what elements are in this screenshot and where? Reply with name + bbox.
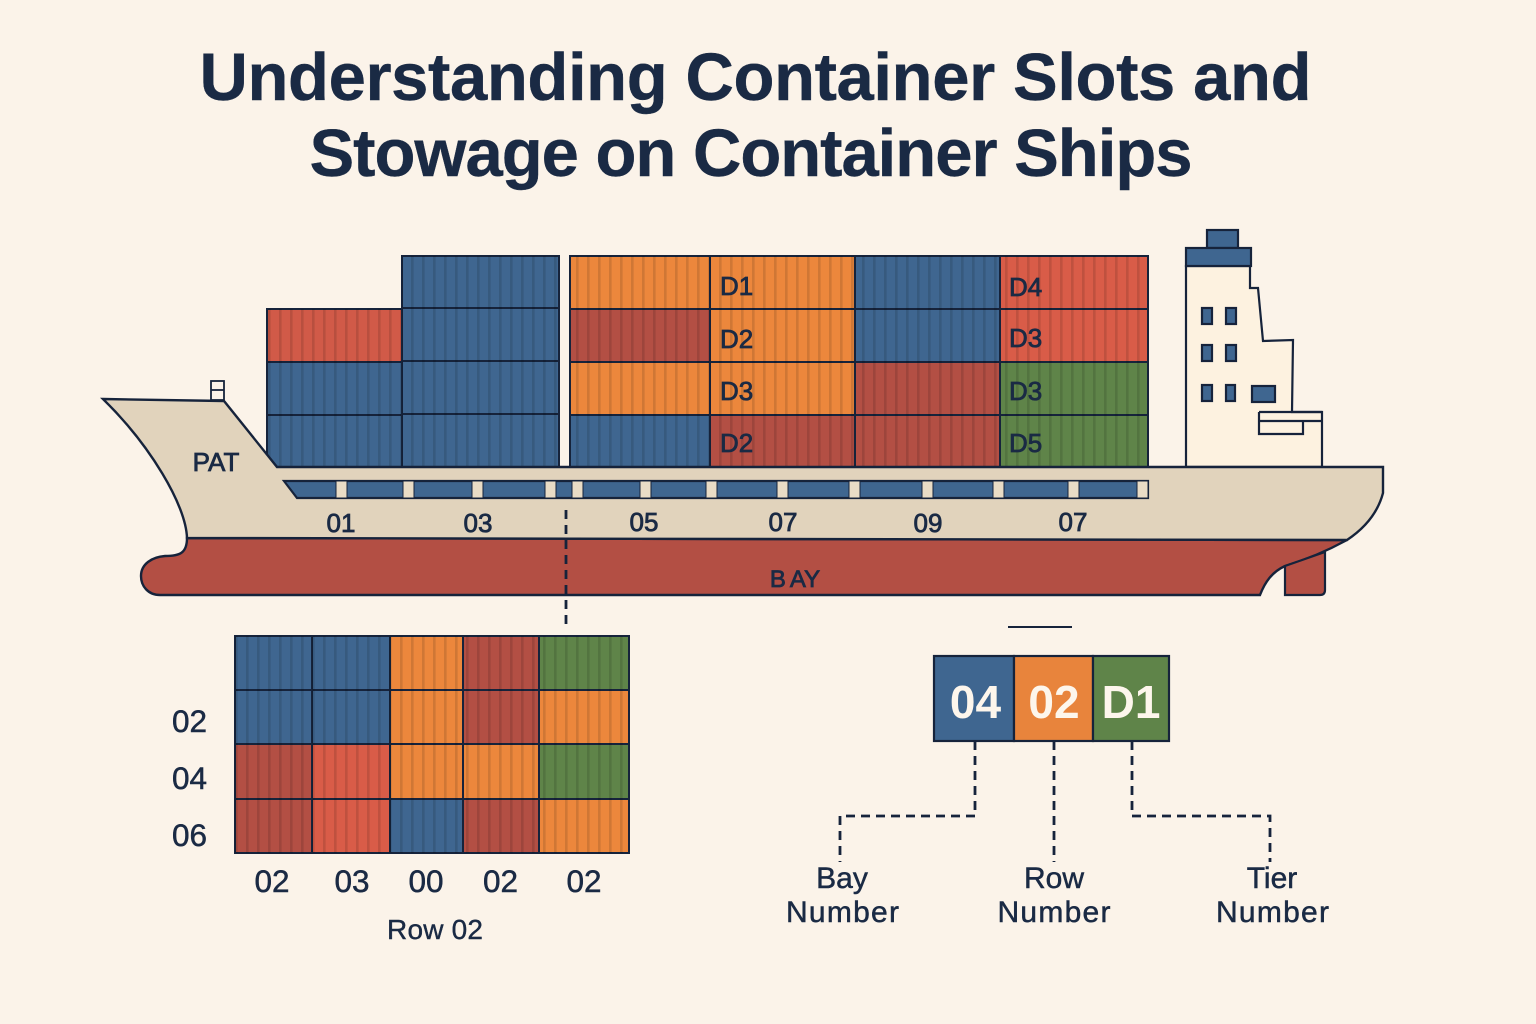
grid row labels: 02 xyxy=(172,703,207,739)
bow mast xyxy=(211,381,224,400)
bay label: BAY xyxy=(770,566,820,593)
bay number label: Bay xyxy=(816,862,868,895)
title xyxy=(200,40,1312,191)
grid column labels: 02 xyxy=(483,863,518,899)
bay numbers: 07 xyxy=(1059,507,1087,537)
bay numbers xyxy=(327,507,1087,538)
container stack: bay 07 with tier labels: D1 xyxy=(720,271,753,301)
container stack: bay 07 with tier labels: D2 xyxy=(720,428,753,458)
upper hull xyxy=(103,399,1383,540)
slot code box: 02 xyxy=(1028,676,1080,728)
grid caption: Row 02 xyxy=(387,914,483,945)
slot code box: D1 xyxy=(1102,676,1160,728)
grid column labels: 03 xyxy=(334,863,370,899)
grid row labels: 04 xyxy=(172,760,207,796)
row number label xyxy=(998,862,1110,929)
grid row labels xyxy=(172,703,207,853)
container stack: aft bay with tier labels xyxy=(1000,256,1148,468)
container stack: bay 05 xyxy=(570,256,710,468)
container ship xyxy=(103,230,1383,595)
rudder xyxy=(1285,552,1325,595)
container stack: bay 03 xyxy=(402,256,559,468)
lower hull xyxy=(141,538,1347,595)
tier number label xyxy=(1216,862,1329,929)
container stack: bay 01 xyxy=(267,309,402,468)
bay numbers: 03 xyxy=(464,508,492,538)
bay numbers: 07 xyxy=(769,507,797,537)
grid column labels xyxy=(254,863,602,899)
short rule xyxy=(1008,626,1072,628)
container stack: bay 07 with tier labels: D2 xyxy=(720,324,753,354)
container stack: bay 07 with tier labels xyxy=(710,256,855,468)
grid row labels: 06 xyxy=(172,817,207,853)
grid column labels: 02 xyxy=(254,863,290,899)
bay numbers: 01 xyxy=(327,508,355,538)
bay numbers: 09 xyxy=(914,508,942,538)
grid column labels: 00 xyxy=(408,863,444,899)
dashed connector xyxy=(565,510,567,628)
container stack: aft bay with tier labels: D5 xyxy=(1009,428,1042,458)
row connector xyxy=(1053,741,1055,862)
tier number label: Number xyxy=(1216,896,1329,929)
container stack: bay 07 with tier labels: D3 xyxy=(720,376,753,406)
bay number label xyxy=(786,862,899,929)
bay numbers: 05 xyxy=(630,507,658,537)
container stack: aft bay with tier labels: D4 xyxy=(1009,272,1042,302)
container stack: aft bay with tier labels: D3 xyxy=(1009,376,1042,406)
accommodation block xyxy=(1186,230,1322,467)
tier number label: Tier xyxy=(1247,862,1297,895)
tier connector xyxy=(1132,741,1270,862)
title: Understanding Container Slots and xyxy=(200,40,1312,115)
row number label: Row xyxy=(1024,862,1084,895)
bow label: PAT xyxy=(193,447,239,477)
container stack: aft bay with tier labels: D3 xyxy=(1009,323,1042,353)
container stack: bay 09 xyxy=(855,256,1000,468)
title: Stowage on Container Ships xyxy=(310,116,1192,191)
row number label: Number xyxy=(998,896,1110,929)
hull cell strip xyxy=(284,481,1148,498)
bay number label: Number xyxy=(786,896,899,929)
slot code box xyxy=(934,656,1169,741)
bay connector xyxy=(840,741,975,862)
grid column labels: 02 xyxy=(566,863,602,899)
slot code box: 04 xyxy=(950,676,1001,728)
cross-section grid xyxy=(235,636,629,853)
